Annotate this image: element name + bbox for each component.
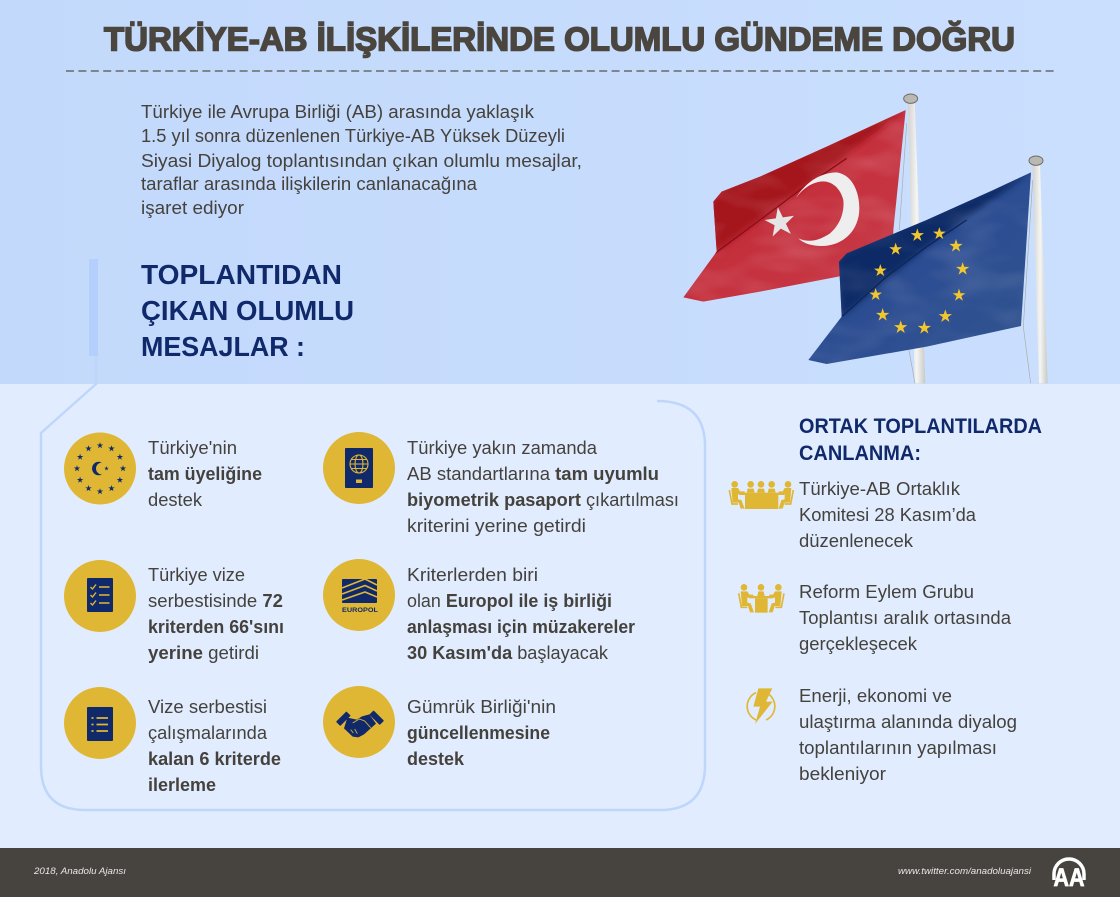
text [148, 564, 284, 663]
icon: energy bolt [747, 688, 775, 724]
text: ilerleme [148, 774, 216, 795]
lower background [0, 384, 1120, 848]
icon: Europol: EUROPOL [342, 607, 378, 614]
text: anlaşması için müzakereler [407, 616, 635, 637]
text: energy dialogue: toplantılarının yapılması [799, 737, 997, 758]
text: partnership committee [799, 478, 977, 551]
icon: passport [323, 432, 395, 504]
text [407, 437, 679, 536]
text: partnership committee: düzenlenecek [799, 530, 914, 551]
text: Türkiye vize [148, 564, 245, 585]
credit: 2018, Anadolu Ajansı [33, 866, 126, 877]
text: reform action group: gerçekleşecek [799, 633, 918, 654]
icon: list document [64, 687, 136, 759]
item: biometric passport [323, 432, 679, 536]
text: biyometrik pasaport çıkartılması [407, 489, 679, 510]
text: AB standartlarına tam uyumlu [407, 463, 659, 484]
icon: large meeting table [729, 481, 793, 509]
text: Vize serbestisi [148, 696, 267, 717]
text: energy dialogue: bekleniyor [799, 763, 886, 784]
Turkish flag [680, 107, 910, 307]
text: 30 Kasım'da başlayacak [407, 642, 609, 663]
item: visa criteria [64, 560, 284, 663]
heading: joint meetings: ORTAK TOPLANTILARDA [799, 415, 1042, 438]
logo: Anadolu Agency: AA [1054, 864, 1084, 892]
heading: joint meetings [799, 415, 1042, 465]
text: olan Europol ile iş birliği [407, 590, 612, 611]
heading: messages: TOPLANTIDAN [141, 259, 342, 290]
text: partnership committee: Türkiye-AB Ortaklık [799, 478, 961, 499]
icon: checklist [64, 560, 136, 632]
text: Gümrük Birliği'nin [407, 696, 556, 717]
text: reform action group: Reform Eylem Grubu [799, 581, 974, 602]
EU stars [869, 227, 969, 334]
text: reform action group [799, 581, 1012, 654]
EU flag [807, 170, 1033, 367]
item: full membership [64, 432, 262, 510]
heading: messages [141, 259, 354, 362]
crescent [796, 172, 859, 246]
text: kalan 6 kriterde [148, 748, 281, 769]
text: tam üyeliğine [148, 463, 262, 484]
panel outline: messages [41, 356, 705, 810]
text: güncellenmesine [407, 722, 550, 743]
text: Kriterlerden biri [407, 564, 538, 585]
heading: joint meetings: CANLANMA: [799, 442, 921, 465]
intro text: Türkiye ile Avrupa Birliği (AB) arasında yaklaşık [141, 101, 535, 122]
item: remaining criteria [64, 687, 281, 795]
icon: Europol [323, 559, 395, 631]
text: yerine getirdi [148, 642, 259, 663]
intro text: 1.5 yıl sonra düzenlenen Türkiye-AB Yüksek Düzeyli [141, 125, 565, 146]
icon: EU stars with crescent [64, 432, 136, 504]
text [407, 564, 635, 663]
text: destek [407, 748, 465, 769]
text: energy dialogue: ulaştırma alanında diyalog [799, 711, 1017, 732]
text: Türkiye'nin [148, 437, 237, 458]
text: partnership committee: Komitesi 28 Kasım’da [799, 504, 977, 525]
accent bar [89, 259, 98, 356]
footer bar [0, 848, 1120, 897]
twitter address: www.twitter.com/anadoluajansi [898, 866, 1032, 877]
text: serbestisinde 72 [148, 590, 283, 611]
star [764, 207, 794, 236]
title: TÜRKİYE-AB İLİŞKİLERİNDE OLUMLU GÜNDEME DOĞRU [104, 20, 1015, 58]
text: kriterden 66'sını [148, 616, 284, 637]
text [148, 696, 281, 795]
intro text: işaret ediyor [141, 197, 244, 218]
icon: handshake [323, 686, 395, 758]
heading: messages: MESAJLAR : [141, 331, 305, 362]
text: energy dialogue [799, 685, 1017, 784]
text: çalışmalarında [148, 722, 268, 743]
text: kriterini yerine getirdi [407, 515, 586, 536]
text: destek [148, 489, 203, 510]
text: reform action group: Toplantısı aralık ortasında [799, 607, 1012, 628]
text [148, 437, 262, 510]
pole: Turkish flag [899, 94, 925, 383]
heading: messages: ÇIKAN OLUMLU [141, 295, 354, 326]
text [407, 696, 556, 769]
text: energy dialogue: Enerji, ekonomi ve [799, 685, 952, 706]
item: Europol [323, 559, 635, 663]
item: customs union [323, 686, 556, 769]
icon: small meeting table [739, 584, 784, 613]
intro text [141, 101, 582, 218]
text: Türkiye yakın zamanda [407, 437, 598, 458]
pole: EU flag [1023, 156, 1048, 383]
intro text: taraflar arasında ilişkilerin canlanacağına [141, 173, 478, 194]
top background [0, 0, 1120, 384]
intro text: Siyasi Diyalog toplantısından çıkan olumlu mesajlar, [141, 150, 582, 171]
flags illustration [680, 94, 1048, 383]
